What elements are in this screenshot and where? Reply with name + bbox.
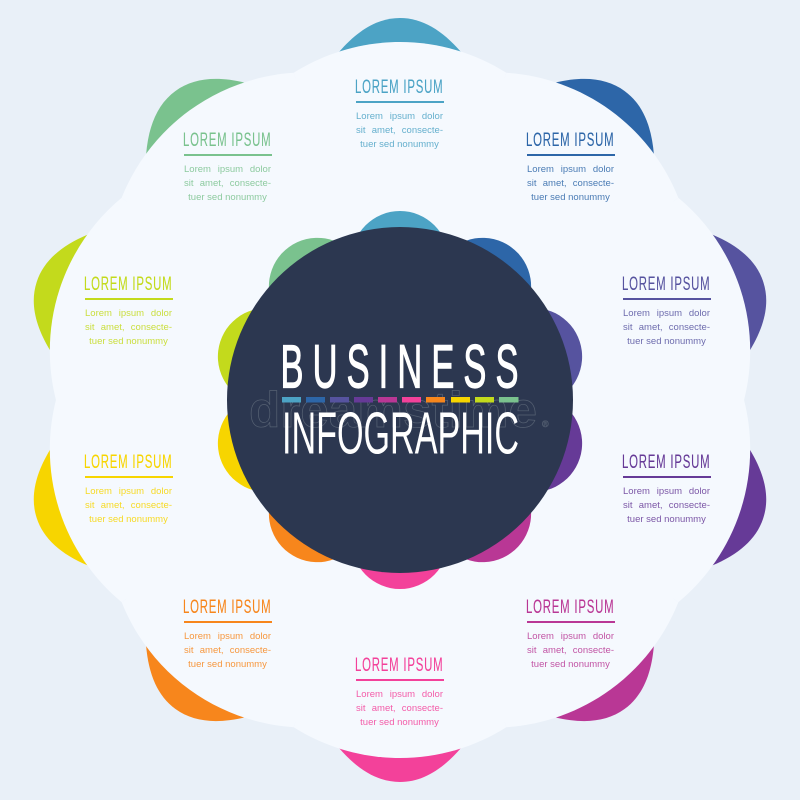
label: yellow: LOREM IPSUM [84, 452, 172, 473]
watermark: dreamstime [249, 382, 537, 438]
heading: BUSINESS: BUSINESS [280, 332, 519, 401]
label: purple: Lorem ipsum dolor [623, 486, 710, 497]
label: dark blue [526, 130, 615, 203]
label: indigo [622, 274, 711, 347]
label: green: LOREM IPSUM [183, 130, 271, 151]
label: magenta: Lorem ipsum dolor [527, 631, 614, 642]
label: yellow [84, 452, 173, 525]
central dark circle [227, 227, 573, 573]
label: dark blue: LOREM IPSUM [526, 130, 614, 151]
label: magenta: LOREM IPSUM [526, 597, 614, 618]
label: orange [183, 597, 272, 670]
label: green: Lorem ipsum dolor [184, 164, 271, 175]
label: magenta: tuer sed nonummy [531, 659, 610, 670]
label: pink: sit amet, consecte- [356, 703, 443, 714]
label: orange: Lorem ipsum dolor [184, 631, 271, 642]
label: green [183, 130, 272, 203]
inner petals [205, 211, 595, 589]
label: green: tuer sed nonummy [188, 192, 267, 203]
label: magenta: sit amet, consecte- [527, 645, 614, 656]
label: dark blue: sit amet, consecte- [527, 178, 614, 189]
label: pink: tuer sed nonummy [360, 717, 439, 728]
label: top blue: tuer sed nonummy [360, 139, 439, 150]
label: yellow: Lorem ipsum dolor [85, 486, 172, 497]
watermark: ® [542, 419, 549, 429]
label: purple: tuer sed nonummy [627, 514, 706, 525]
label: pink: Lorem ipsum dolor [356, 689, 443, 700]
label: indigo: sit amet, consecte- [623, 322, 710, 333]
label: orange: sit amet, consecte- [184, 645, 271, 656]
label: yellow: tuer sed nonummy [89, 514, 168, 525]
label: pink [355, 655, 444, 728]
label: magenta [526, 597, 615, 670]
colour dash strip [282, 397, 518, 402]
label: purple: LOREM IPSUM [622, 452, 710, 473]
label: lime: tuer sed nonummy [89, 336, 168, 347]
label: lime [84, 274, 173, 347]
label: top blue: sit amet, consecte- [356, 125, 443, 136]
label: lime: Lorem ipsum dolor [85, 308, 172, 319]
label: top blue: LOREM IPSUM [355, 77, 443, 98]
label: dark blue: tuer sed nonummy [531, 192, 610, 203]
label: top blue [355, 77, 444, 150]
label: lime: sit amet, consecte- [85, 322, 172, 333]
label: purple: sit amet, consecte- [623, 500, 710, 511]
label: indigo: tuer sed nonummy [627, 336, 706, 347]
heading: INFOGRAPHIC: INFOGRAPHIC [282, 400, 519, 466]
label: dark blue: Lorem ipsum dolor [527, 164, 614, 175]
label: orange: tuer sed nonummy [188, 659, 267, 670]
label: pink: LOREM IPSUM [355, 655, 443, 676]
label: top blue: Lorem ipsum dolor [356, 111, 443, 122]
label: indigo: Lorem ipsum dolor [623, 308, 710, 319]
label: purple [622, 452, 711, 525]
label: indigo: LOREM IPSUM [622, 274, 710, 295]
label: green: sit amet, consecte- [184, 178, 271, 189]
label: yellow: sit amet, consecte- [85, 500, 172, 511]
label: lime: LOREM IPSUM [84, 274, 172, 295]
label: orange: LOREM IPSUM [183, 597, 271, 618]
